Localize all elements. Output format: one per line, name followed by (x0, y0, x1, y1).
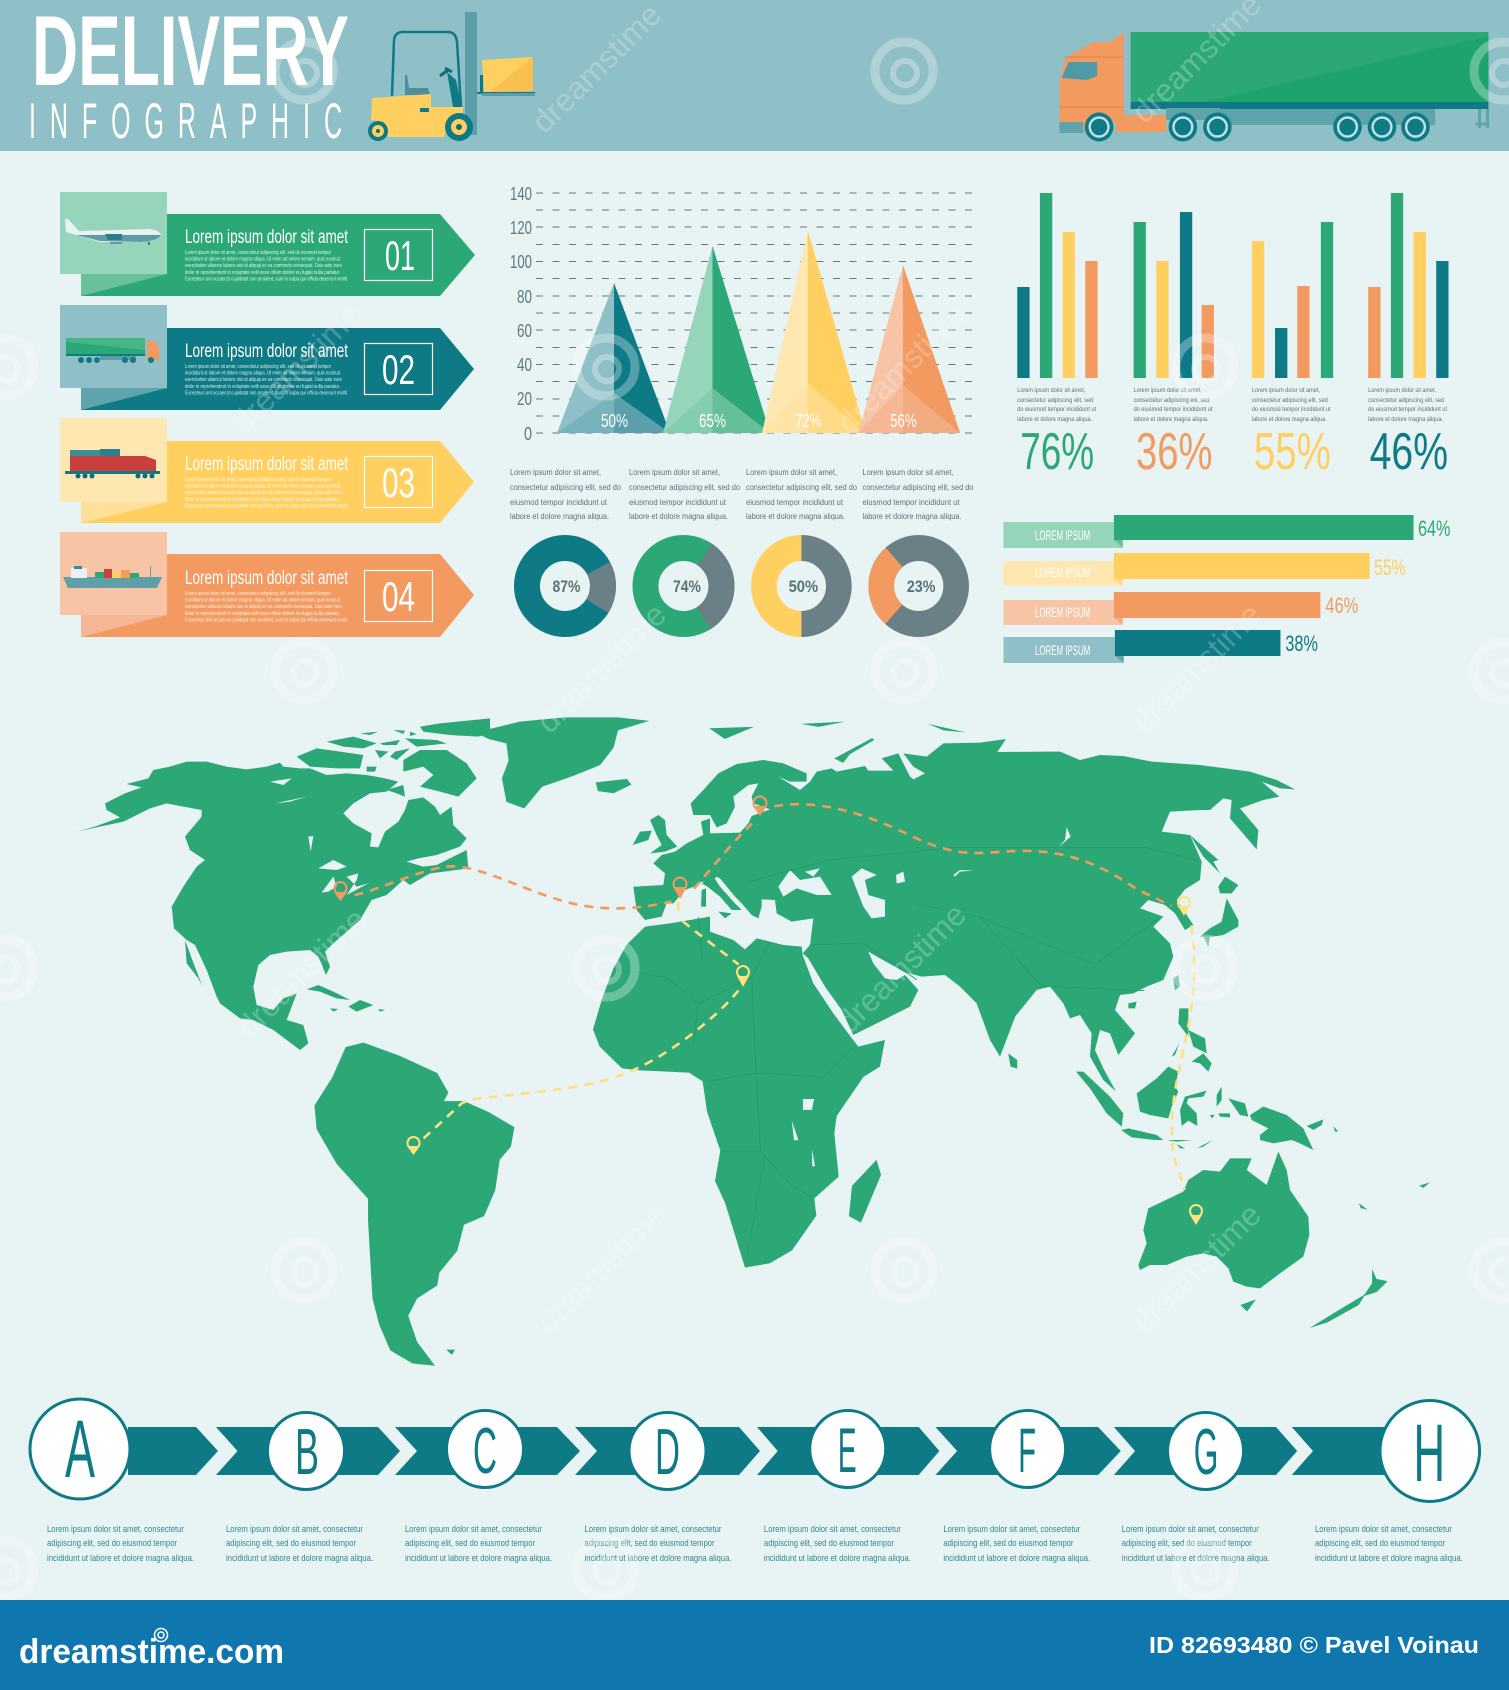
ribbon 01: Excepteur sint occaecat cupidatat non proident, sunt in culpa qui officia deserunt mollit. (185, 276, 348, 282)
routes (355, 804, 1194, 1190)
bar chart group 4: Lorem ipsum dolor sit amet, (1368, 387, 1436, 394)
ribbon 02: Lorem ipsum dolor sit amet (185, 341, 349, 362)
horizontal bar 55%: LOREM IPSUM (1035, 564, 1090, 580)
horizontal bar 38% (1003, 630, 1318, 663)
bar chart group 2: do eiusmod tempor incididunt ut (1134, 406, 1213, 413)
timeline captions: Lorem ipsum dolor sit amet, consectetur (1315, 1524, 1452, 1534)
timeline captions: incididunt ut labore et dolore magna aliqua. (764, 1553, 911, 1563)
watermark: dreamstime (529, 1196, 673, 1340)
step F (990, 1410, 1066, 1488)
watermark: dreamstime (229, 901, 373, 1045)
horizontal bar 46%: 46% (1325, 593, 1358, 618)
ribbon 03: incididunt ut labore et dolore magna aliqua. Ut enim ad minim veniam, quis nostrud (185, 484, 340, 490)
triangle 65% (663, 246, 770, 433)
inland seas (778, 827, 1071, 918)
timeline captions: incididunt ut labore et dolore magna aliqua. (943, 1553, 1090, 1563)
donut 87%: 87% (552, 577, 580, 596)
watermark: dreamstime (829, 896, 973, 1040)
horizontal bar 38%: LOREM IPSUM (1035, 642, 1090, 658)
watermark: dreamstime (1124, 596, 1268, 740)
donut 87% (527, 548, 603, 624)
timeline captions: adipiscing elit, sed do eiusmod tempor (1315, 1538, 1445, 1548)
south america and greenland (314, 717, 649, 1366)
route: orange (355, 804, 1172, 908)
triangle 56% (859, 265, 960, 433)
north american lakes (270, 778, 368, 895)
icon: truck (1060, 32, 1489, 142)
timeline captions: Lorem ipsum dolor sit amet, consectetur (226, 1524, 363, 1534)
triangle chart: 120 (510, 218, 532, 238)
step E: E (838, 1416, 857, 1486)
subtitle: infographic: INFOGRAPHIC (29, 94, 342, 149)
step F: F (1018, 1416, 1036, 1486)
text columns under triangle chart: Lorem ipsum dolor sit amet, (510, 468, 601, 477)
ribbon 03: Lorem ipsum dolor sit amet, consectetur adipiscing elit, sed do eiusmod tempor (185, 477, 331, 483)
step A: A (65, 1404, 95, 1495)
timeline captions: adipiscing elit, sed do eiusmod tempor (764, 1538, 894, 1548)
timeline captions: adipiscing elit, sed do eiusmod tempor (405, 1538, 535, 1548)
text columns under triangle chart (510, 468, 974, 521)
donut 50%: 50% (789, 577, 818, 596)
ribbon 04 (60, 532, 474, 637)
ribbon 04: incididunt ut labore et dolore magna aliqua. Ut enim ad minim veniam, quis nostrud (185, 598, 340, 604)
bar chart group 1: consectetur adipiscing elit, sed (1017, 397, 1094, 404)
bar chart group 2: labore et dolore magna aliqua. (1134, 416, 1209, 423)
bar chart group 3: do eiusmod tempor incididunt ut (1252, 406, 1331, 413)
bar chart group 4: do eiusmod tempor incididunt ut (1368, 406, 1447, 413)
timeline captions: incididunt ut labore et dolore magna aliqua. (47, 1553, 194, 1563)
text columns under triangle chart: consectetur adipiscing elit, sed do (629, 483, 741, 492)
footer logo: dreamstime.com (19, 1633, 284, 1671)
watermark: dreamstime (224, 296, 368, 440)
timeline captions: incididunt ut labore et dolore magna aliqua. (584, 1553, 732, 1563)
triangle chart: 0 (524, 424, 532, 444)
triangle 65%: 65% (699, 411, 726, 431)
horizontal bar 64% (1003, 515, 1450, 548)
icon: plane (65, 219, 161, 245)
timeline captions: adipiscing elit, sed do eiusmod tempor (943, 1538, 1073, 1548)
ribbon 01: exercitation ullamco laboris nisi ut aliquip ex ea commodo consequat. Duis aute irure (185, 263, 342, 269)
timeline captions: adipiscing elit, sed do eiusmod tempor (226, 1538, 356, 1548)
timeline captions: Lorem ipsum dolor sit amet, consectetur (584, 1524, 722, 1534)
ribbon 03: exercitation ullamco laboris nisi ut aliquip ex ea commodo consequat. Duis aute irure (185, 490, 342, 496)
bar chart group 3: consectetur adipiscing elit, sed (1252, 397, 1328, 404)
step G (1168, 1412, 1243, 1490)
ribbon 02: dolor in reprehenderit in voluptate velit esse cillum dolore eu fugiat nulla pariatur. (185, 384, 340, 390)
watermark: dreamstime (524, 0, 668, 140)
triangle chart: 100 (510, 252, 532, 272)
ribbon 02: 02 (382, 346, 415, 393)
timeline captions: Lorem ipsum dolor sit amet, consectetur (764, 1524, 901, 1534)
timeline captions: adipiscing elit, sed do eiusmod tempor (1122, 1538, 1252, 1548)
southeast asia and australia (1076, 1008, 1338, 1288)
triangle 72%: 72% (795, 411, 821, 431)
step E (810, 1410, 886, 1488)
bar chart group 1: 76% (1020, 422, 1094, 480)
triangle chart: 20 (517, 389, 532, 409)
bar chart group 4 (1368, 193, 1449, 480)
text columns under triangle chart: labore et dolore magna aliqua. (862, 512, 962, 521)
timeline captions: incididunt ut labore et dolore magna aliqua. (1315, 1553, 1463, 1563)
timeline captions: Lorem ipsum dolor sit amet, consectetur (943, 1524, 1080, 1534)
donut 74%: 74% (673, 577, 701, 596)
text columns under triangle chart: Lorem ipsum dolor sit amet, (862, 468, 954, 477)
text columns under triangle chart: Lorem ipsum dolor sit amet, (746, 468, 837, 477)
icon: forklift (368, 12, 535, 141)
timeline captions: incididunt ut labore et dolore magna aliqua. (405, 1553, 552, 1563)
step H: H (1414, 1407, 1445, 1499)
text columns under triangle chart: eiusmod tempor incididunt ut (746, 498, 844, 507)
route: yellow (422, 902, 1194, 1190)
world map (73, 717, 1430, 1366)
horizontal bar 55%: 55% (1374, 555, 1406, 580)
ribbon 04: Lorem ipsum dolor sit amet, consectetur adipiscing elit, sed do eiusmod tempor (185, 591, 331, 597)
donut 23% (881, 548, 956, 624)
timeline captions: adipiscing elit, sed do eiusmod tempor (47, 1538, 177, 1548)
footer band (0, 1600, 1509, 1690)
triangle 72% (762, 230, 865, 433)
bar chart group 1: do eiusmod tempor incididunt ut (1017, 406, 1096, 413)
timeline chevrons (128, 1427, 1391, 1475)
timeline captions (47, 1524, 1463, 1563)
horizontal bar 46%: LOREM IPSUM (1035, 604, 1090, 620)
watermark: dreamstime (1124, 1196, 1268, 1340)
step D: D (655, 1415, 680, 1488)
step B: B (295, 1415, 319, 1488)
text columns under triangle chart: labore et dolore magna aliqua. (629, 512, 728, 521)
text columns under triangle chart: Lorem ipsum dolor sit amet, (629, 468, 720, 477)
ribbon 01: 01 (385, 232, 415, 279)
text columns under triangle chart: consectetur adipiscing elit, sed do (862, 483, 974, 492)
bar chart group 2 (1134, 212, 1214, 480)
icon: train (65, 449, 160, 478)
other islands, lakes and borders (613, 722, 1430, 1328)
bar chart group 4: 46% (1370, 422, 1448, 480)
text columns under triangle chart: consectetur adipiscing elit, sed do (746, 483, 858, 492)
step C (446, 1410, 524, 1488)
footer credit: ID 82693480 © Pavel Voinau (1149, 1632, 1479, 1658)
horizontal bar 46% (1003, 592, 1358, 625)
ribbon 03 (60, 418, 474, 523)
text columns under triangle chart: labore et dolore magna aliqua. (746, 512, 845, 521)
step A (30, 1399, 130, 1499)
icon: cargo ship (63, 566, 162, 588)
text columns under triangle chart: labore et dolore magna aliqua. (510, 512, 609, 521)
donut 23%: 23% (907, 577, 935, 596)
timeline captions: incididunt ut labore et dolore magna aliqua. (226, 1553, 373, 1563)
east asian islands (1128, 835, 1238, 1008)
bar chart group 4: labore et dolore magna aliqua. (1368, 416, 1443, 423)
footer spiral icon (154, 1628, 168, 1642)
ribbon 01: Lorem ipsum dolor sit amet (185, 227, 349, 248)
watermark: dreamstime (529, 596, 673, 740)
icon: small truck (66, 338, 159, 363)
bar chart group 4: consectetur adipiscing elit, sed (1368, 397, 1444, 404)
ribbon 01: Lorem ipsum dolor sit amet, consectetur adipiscing elit, sed do eiusmod tempor (185, 250, 331, 256)
donut 50% (764, 548, 839, 624)
ribbon 01: dolor in reprehenderit in voluptate velit esse cillum dolore eu fugiat nulla pariatur. (185, 270, 340, 276)
bar chart group 2: consectetur adipiscing elit, sed (1134, 397, 1210, 404)
triangle chart: 80 (517, 287, 532, 307)
ribbon 02: incididunt ut labore et dolore magna aliqua. Ut enim ad minim veniam, quis nostrud (185, 370, 340, 376)
watermark: dreamstime (829, 296, 973, 440)
timeline captions: Lorem ipsum dolor sit amet, consectetur (47, 1524, 184, 1534)
step D (629, 1412, 706, 1490)
bar chart group 1 (1017, 193, 1098, 480)
ribbon 04: 04 (382, 573, 415, 620)
bar chart group 2: 36% (1136, 422, 1212, 480)
ribbon 02: Excepteur sint occaecat cupidatat non proident, sunt in culpa qui officia deserunt mollit. (185, 390, 348, 396)
timeline captions: incididunt ut labore et dolore magna aliqua. (1122, 1553, 1270, 1563)
bar chart group 1: labore et dolore magna aliqua. (1017, 416, 1092, 423)
timeline captions: adipiscing elit, sed do eiusmod tempor (584, 1538, 714, 1548)
location pins (334, 796, 1202, 1225)
text columns under triangle chart: eiusmod tempor incididunt ut (862, 498, 960, 507)
ribbon 02: Lorem ipsum dolor sit amet, consectetur adipiscing elit, sed do eiusmod tempor (185, 364, 331, 370)
ribbon 04: dolor in reprehenderit in voluptate velit esse cillum dolore eu fugiat nulla pariatur. (185, 611, 340, 617)
header band (0, 0, 1509, 151)
triangle 50% (557, 283, 670, 433)
ribbon 02: exercitation ullamco laboris nisi ut aliquip ex ea commodo consequat. Duis aute irure (185, 377, 342, 383)
bar chart group 3 (1252, 222, 1333, 480)
triangle chart: 140 (510, 184, 532, 204)
bar chart group 2: Lorem ipsum dolor sit amet, (1134, 387, 1202, 394)
step H (1380, 1400, 1480, 1502)
step G: G (1194, 1416, 1218, 1488)
triangle chart: 40 (517, 355, 532, 375)
ribbon 03: Lorem ipsum dolor sit amet (185, 454, 349, 475)
triangle 56%: 56% (890, 411, 917, 431)
timeline captions: Lorem ipsum dolor sit amet, consectetur (405, 1524, 542, 1534)
timeline captions: Lorem ipsum dolor sit amet, consectetur (1122, 1524, 1259, 1534)
eurasia and africa (593, 739, 1295, 1268)
ribbon 01: incididunt ut labore et dolore magna aliqua. Ut enim ad minim veniam, quis nostrud (185, 256, 340, 262)
triangle chart: 60 (517, 321, 532, 341)
text columns under triangle chart: eiusmod tempor incididunt ut (629, 498, 727, 507)
horizontal bar 55% (1003, 553, 1406, 586)
ribbon 04: Excepteur sint occaecat cupidatat non proident, sunt in culpa qui officia deserunt mollit. (185, 618, 348, 624)
text columns under triangle chart: eiusmod tempor incididunt ut (510, 498, 608, 507)
ribbon 04: Lorem ipsum dolor sit amet (185, 568, 349, 589)
bar chart group 1: Lorem ipsum dolor sit amet, (1017, 387, 1085, 394)
donut 74% (646, 548, 722, 624)
bar chart group 3: 55% (1254, 422, 1331, 480)
ribbon 03: dolor in reprehenderit in voluptate velit esse cillum dolore eu fugiat nulla pariatur. (185, 497, 340, 503)
north america (73, 718, 490, 1050)
triangle 50%: 50% (601, 411, 628, 431)
horizontal bar 38%: 38% (1285, 631, 1318, 656)
ribbon 02 (60, 305, 474, 410)
bar chart group 3: labore et dolore magna aliqua. (1252, 416, 1327, 423)
ribbon 03: 03 (382, 459, 415, 506)
bar chart group 3: Lorem ipsum dolor sit amet, (1252, 387, 1320, 394)
step C: C (473, 1414, 497, 1487)
horizontal bar 64%: LOREM IPSUM (1035, 527, 1090, 543)
ribbon 03: Excepteur sint occaecat cupidatat non proident, sunt in culpa qui officia deserunt mollit. (185, 504, 348, 510)
text columns under triangle chart: consectetur adipiscing elit, sed do (510, 483, 622, 492)
ribbon 04: exercitation ullamco laboris nisi ut aliquip ex ea commodo consequat. Duis aute irure (185, 604, 342, 610)
triangle chart (510, 184, 975, 444)
step B (268, 1412, 344, 1490)
horizontal bar 64%: 64% (1418, 516, 1450, 541)
ribbon 01 (60, 192, 475, 296)
